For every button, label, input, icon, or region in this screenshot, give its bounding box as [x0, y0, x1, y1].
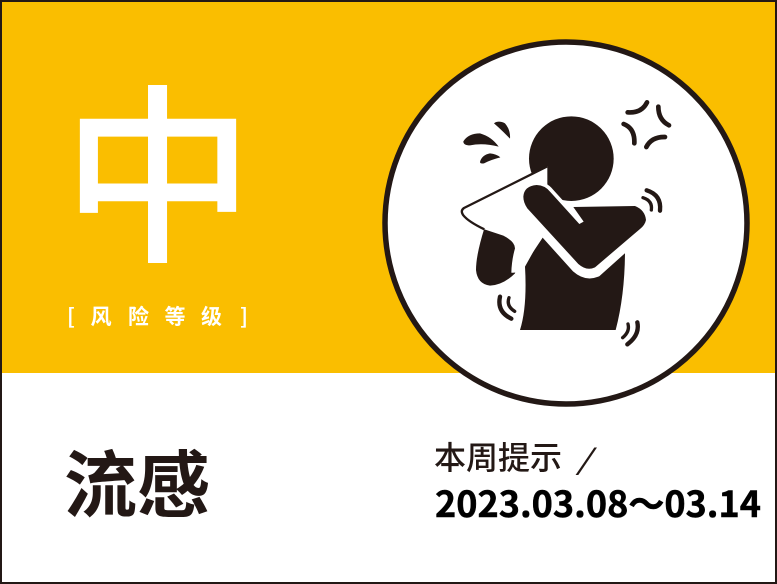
circle badge	[385, 42, 747, 404]
date range: 2023.03.08～03.14	[435, 476, 761, 528]
icon: arm	[523, 185, 646, 269]
icon: droplets	[463, 122, 510, 163]
weekly tip label: 本周提示	[434, 433, 562, 479]
icon: person coughing into elbow	[462, 102, 669, 344]
risk level label: [风险等级]	[67, 301, 248, 331]
icon: shake lines lower right	[623, 322, 638, 344]
icon: torso	[520, 237, 625, 330]
icon: shake lines lower left	[499, 297, 515, 319]
title: disease name: 流感	[64, 427, 210, 533]
risk level character: 中	[62, 25, 254, 303]
icon: anger mark	[624, 102, 669, 147]
icon: head	[529, 116, 614, 201]
icon: forearm left	[476, 228, 520, 286]
icon: tissue outline	[462, 166, 547, 229]
panel: yellow risk band	[0, 0, 777, 373]
icon: arm lower outline	[530, 212, 627, 270]
icon: tissue	[462, 166, 553, 273]
slash: /	[575, 437, 598, 478]
icon: shake lines elbow	[643, 190, 660, 211]
